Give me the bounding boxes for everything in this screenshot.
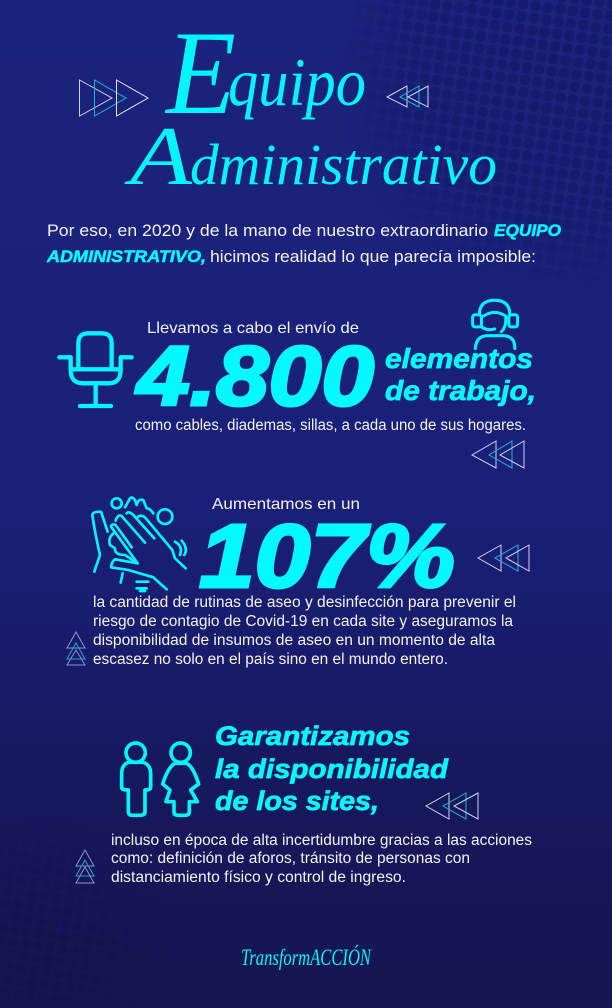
panel: envio de elementos — [59, 300, 536, 468]
icon: triangles up — [67, 632, 85, 665]
text: elementos de trabajo: elementos — [385, 343, 533, 374]
text: llevamos: Llevamos a cabo el envío de — [147, 320, 359, 337]
panel: disponibilidad de sites — [76, 721, 532, 886]
icon: triangles left — [426, 793, 478, 819]
text: incluso — [111, 832, 532, 886]
text: elementos de trabajo — [385, 343, 536, 406]
text: incluso: incluso en época de alta incertidumbre gracias a las acciones — [111, 832, 532, 849]
icon: triangles left, title — [387, 86, 428, 107]
title: dministrativo — [190, 132, 497, 197]
icon: triangles right, title — [80, 80, 148, 116]
footer logo: TransformACCIÓN: TransformACCIÓN — [241, 944, 372, 970]
title — [124, 6, 497, 203]
icon: man — [122, 743, 151, 815]
text: elementos de trabajo: de trabajo, — [385, 375, 536, 406]
icon: washing hands — [92, 497, 186, 591]
text: rutinas — [93, 594, 516, 668]
intro text — [46, 221, 561, 266]
icon: headset agent — [473, 300, 518, 349]
text: rutinas: disponibilidad de insumos de aseo en un momento de alta — [93, 632, 495, 649]
text: como cables: como cables, diademas, sillas, a cada uno de sus hogares. — [135, 417, 526, 434]
text: rutinas: riesgo de contagio de Covid-19 en cada site y aseguramos la — [93, 613, 513, 630]
intro text: ADMINISTRATIVO, — [46, 247, 206, 266]
icon: office chair — [59, 333, 132, 406]
text: garantizamos — [215, 721, 449, 816]
icon: triangles left — [472, 441, 524, 468]
icon: triangles up — [76, 850, 94, 883]
number: 107%: 107% — [199, 507, 455, 607]
title: E — [164, 6, 236, 139]
intro text: EQUIPO — [494, 221, 561, 240]
text: garantizamos: Garantizamos — [215, 721, 410, 751]
text: garantizamos: la disponibilidad — [215, 754, 449, 784]
intro text: Por eso, en 2020 y de la mano de nuestro extraordinario — [47, 221, 488, 240]
text: garantizamos: de los sites, — [215, 786, 379, 816]
text: incluso: distanciamiento físico y control de ingreso. — [111, 869, 406, 886]
intro text: hicimos realidad lo que parecía imposible: — [210, 247, 536, 266]
text: rutinas: escasez no solo en el país sino en el mundo entero. — [93, 651, 448, 668]
panel: rutinas de aseo — [67, 496, 529, 668]
icon: woman — [163, 743, 199, 815]
icon: triangles left — [478, 545, 529, 571]
title: A — [124, 110, 193, 203]
title: quipo — [228, 44, 366, 120]
text: aumentamos: Aumentamos en un — [212, 496, 360, 513]
text: rutinas: la cantidad de rutinas de aseo y desinfección para prevenir el — [93, 594, 516, 611]
text: incluso: como: definición de aforos, tránsito de personas con — [111, 850, 470, 867]
number: 4.800: 4.800 — [135, 329, 374, 423]
